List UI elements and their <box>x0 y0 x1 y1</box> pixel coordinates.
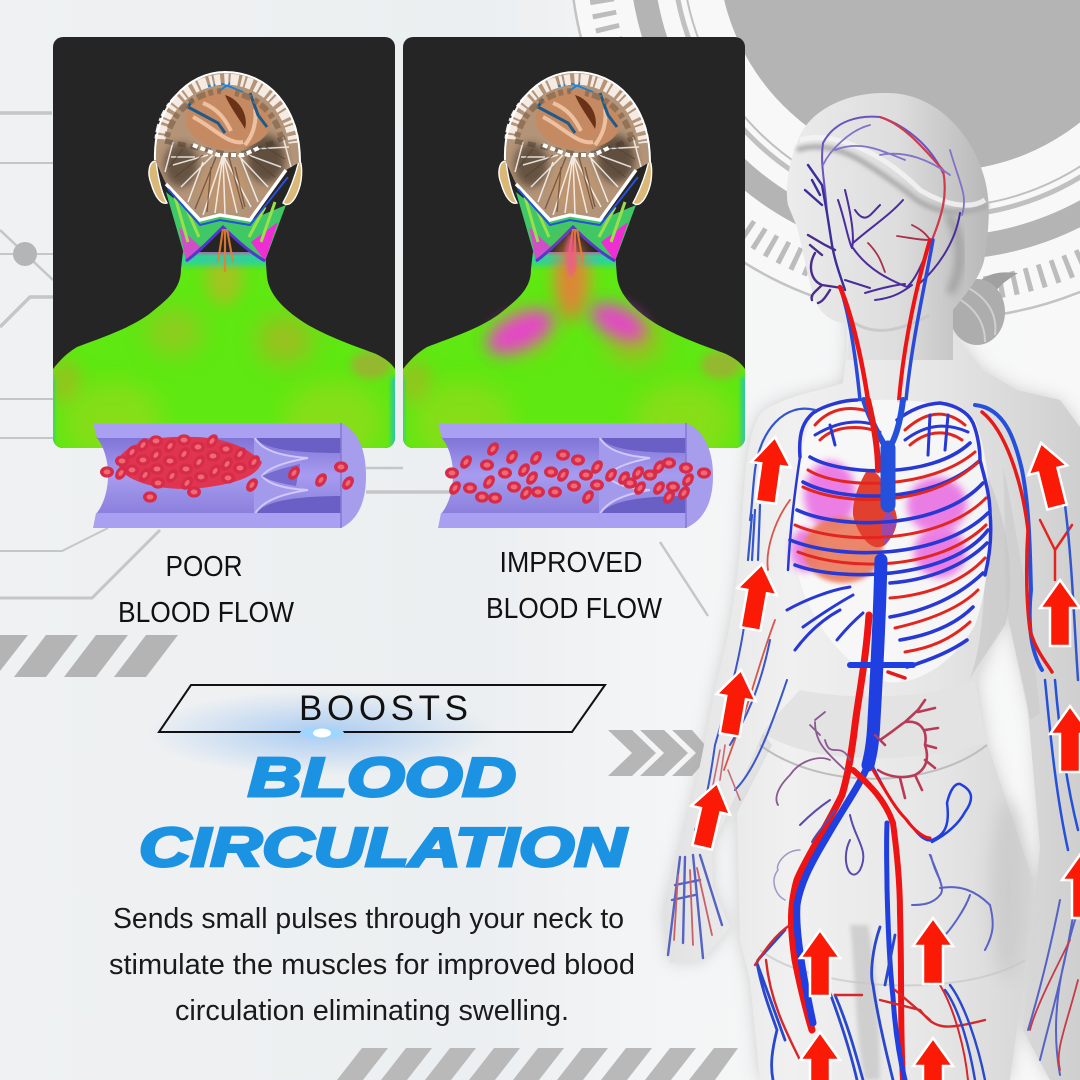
arm vessels <box>668 405 1078 1075</box>
head <box>787 93 989 360</box>
aorta and vena cava <box>755 400 993 1080</box>
panel: poor blood flow thermal image <box>53 37 395 448</box>
hair bun <box>949 272 1018 345</box>
arrow: left wrist <box>683 779 736 852</box>
neck main vessels <box>840 240 933 400</box>
rib cage <box>787 400 991 667</box>
red arrows <box>683 434 1080 1080</box>
abdominal vessels <box>875 700 938 798</box>
body text: circulation eliminating swelling. <box>175 995 569 1027</box>
top right disc and concentric rings <box>569 0 1080 320</box>
human body figure <box>663 93 1080 1080</box>
chevrons <box>608 730 712 776</box>
arrow: left mid arm <box>731 561 782 632</box>
body silhouette <box>663 290 1080 1080</box>
heading: blood circulation: BLOOD <box>248 746 516 808</box>
caption: poor blood flow: BLOOD FLOW <box>118 597 295 629</box>
heading: blood circulation <box>139 746 628 878</box>
heading: blood circulation: CIRCULATION <box>139 816 628 878</box>
arrow: left upper arm <box>746 434 795 505</box>
body text <box>109 903 635 1027</box>
blood clot <box>100 432 356 503</box>
arrow: left forearm <box>710 667 761 738</box>
badge: boosts <box>95 685 605 775</box>
body text: Sends small pulses through your neck to <box>113 903 624 935</box>
caption: poor blood flow: POOR <box>166 551 242 583</box>
badge: boosts: BOOSTS <box>299 689 468 728</box>
caption: improved blood flow: IMPROVED <box>500 547 642 579</box>
stripes bottom <box>337 1048 738 1080</box>
leg vessels <box>757 927 895 1080</box>
circuit line decoration <box>0 113 708 616</box>
decorative stripes left <box>0 635 178 677</box>
caption: poor blood flow <box>118 551 295 629</box>
caption: improved blood flow: BLOOD FLOW <box>486 593 663 625</box>
blood cells <box>445 440 711 506</box>
vessel: improved blood flow <box>438 423 713 528</box>
body text: stimulate the muscles for improved blood <box>109 949 635 981</box>
chest highlight <box>794 400 990 683</box>
vessel: poor blood flow <box>93 423 366 528</box>
head vessels <box>805 117 964 303</box>
lungs <box>791 461 967 578</box>
body shadow <box>663 290 1080 1080</box>
heart <box>803 471 897 583</box>
panel: improved blood flow thermal image <box>403 37 745 448</box>
caption: improved blood flow <box>486 547 663 625</box>
